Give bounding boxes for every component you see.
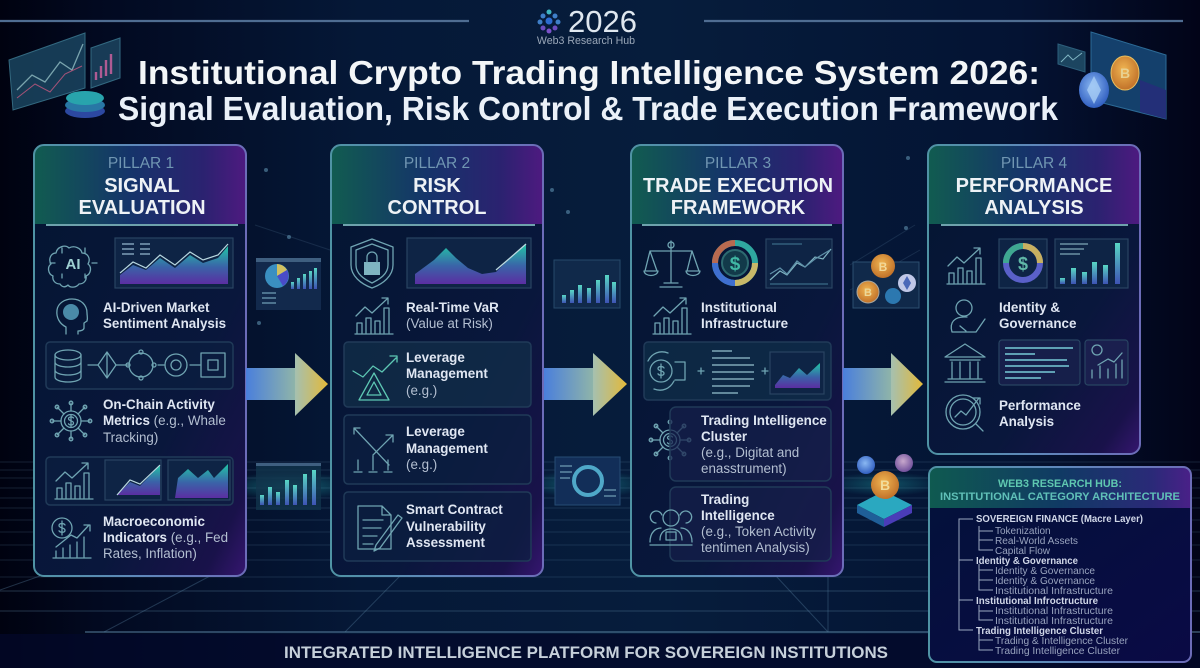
text: macro indicators: Macroeconomic <box>103 514 205 529</box>
text: ai-driven sentiment: Sentiment Analysis <box>103 316 226 331</box>
architecture header <box>929 467 1191 508</box>
category tree <box>959 514 1143 657</box>
mini dashboard: bars lower left <box>256 463 321 510</box>
pillar 4 header: PERFORMANCE <box>956 175 1112 197</box>
box: trading intelligence cluster: (e.g., Digitat and <box>701 445 799 460</box>
mini dashboard: coins: B <box>864 287 872 299</box>
logo: 2026 Web3 Research Hub: Web3 Research Hub <box>537 35 635 47</box>
chart: dollar donut: $ <box>730 254 741 275</box>
box: smart contract <box>344 492 531 561</box>
mini dashboard: bars upper middle <box>554 260 620 308</box>
chart: trade line panel <box>766 239 832 288</box>
pillar 3 header: TRADE EXECUTION <box>643 175 833 197</box>
icon: bar growth <box>355 298 393 334</box>
box: leverage management 1: Leverage <box>406 350 465 365</box>
icon: magnifier analysis <box>946 395 983 431</box>
arrow: pillar 2 to 3 <box>544 353 627 416</box>
logo: 2026 Web3 Research Hub <box>537 4 637 47</box>
text: institutional infrastructure: Infrastructure <box>701 316 788 331</box>
title <box>118 54 1059 127</box>
text: ai-driven sentiment <box>103 300 226 331</box>
text: performance analysis <box>999 398 1081 429</box>
category tree: Identity & Governance <box>976 556 1078 567</box>
text: real-time var: Real-Time VaR <box>406 300 499 315</box>
mini dashboard: donut lower middle <box>555 457 620 505</box>
pillar 2 header <box>331 145 543 224</box>
text: on-chain activity: On-Chain Activity <box>103 397 215 412</box>
chart: performance donut <box>999 239 1047 288</box>
icon: head with brain <box>57 299 87 334</box>
text: macro indicators: Indicators (e.g., Fed <box>103 530 228 545</box>
arrow: pillar 3 to 4 <box>843 353 923 416</box>
mini dashboard: coins: B <box>879 260 888 274</box>
icon: macro dollar chart <box>52 518 91 558</box>
category tree: Trading Intelligence Cluster <box>976 626 1103 637</box>
text: performance analysis: Performance <box>999 398 1081 413</box>
box: trading intelligence cluster: enasstrument) <box>701 461 787 476</box>
illustration: coins on platform: B <box>880 477 890 493</box>
category tree: Institutional Infroctructure <box>976 596 1098 607</box>
box: leverage management 1: Management <box>406 366 488 381</box>
text: macro indicators: Rates, Inflation) <box>103 546 197 561</box>
pillar 2 header: RISK <box>413 175 461 197</box>
text: macro indicators <box>103 514 228 561</box>
chart: performance donut: $ <box>1018 254 1028 274</box>
text: ai-driven sentiment: AI-Driven Market <box>103 300 210 315</box>
pillar 2 header: PILLAR 2 <box>404 155 470 172</box>
icon: performance chart <box>947 248 985 284</box>
mini dashboard: coins <box>853 254 919 308</box>
icon: team lock <box>650 510 692 545</box>
chart: dollar donut <box>715 243 755 283</box>
icon: AI brain: AI <box>66 256 80 273</box>
category tree: Real-World Assets <box>995 536 1078 547</box>
pillar 1 header: SIGNAL <box>104 175 180 197</box>
pillar 3 header: FRAMEWORK <box>671 197 806 219</box>
title: Signal Evaluation, Risk Control & Trade Execution Framework <box>118 90 1059 127</box>
text: performance analysis: Analysis <box>999 414 1054 429</box>
text: real-time var: (Value at Risk) <box>406 316 493 331</box>
pillar 4 header: PILLAR 4 <box>1001 155 1068 172</box>
text: identity governance: Identity & <box>999 300 1060 315</box>
top rule lines <box>0 20 1183 22</box>
category tree: Institutional Infrastructure <box>995 586 1113 597</box>
category tree: SOVEREIGN FINANCE (Macre Layer) <box>976 514 1143 525</box>
box: leverage management 2: Leverage <box>406 424 465 439</box>
illustration: crypto coins on screens: B <box>1120 65 1130 81</box>
box: trading intelligence activity <box>670 487 831 561</box>
box: leverage management 2 <box>344 415 531 484</box>
box: on-chain icon strip <box>46 342 233 389</box>
chart: performance bars <box>1055 239 1128 288</box>
icon: identity person check <box>951 300 985 332</box>
box: leverage management 1 <box>344 342 531 407</box>
arrow: pillar 1 to 2 <box>246 353 328 416</box>
category tree: Tokenization <box>995 526 1051 537</box>
logo: 2026 Web3 Research Hub: 2026 <box>568 4 637 39</box>
pillar 3 header <box>631 145 843 224</box>
illustration: trading screens with server stack <box>9 33 120 118</box>
box: leverage management 2: Management <box>406 441 488 456</box>
box: leverage management 1: (e.g.) <box>406 383 437 398</box>
illustration: coins on platform <box>857 454 913 527</box>
panel: pillar 4 performance analysis <box>928 145 1140 454</box>
text: on-chain activity <box>103 397 226 445</box>
category tree: Trading & Intelligence Cluster <box>995 636 1129 647</box>
icon: cluster network <box>649 420 691 460</box>
chart: sentiment area <box>115 238 233 288</box>
pillar 1 header <box>34 145 246 224</box>
box: trading intelligence cluster <box>670 407 831 481</box>
text: institutional infrastructure: Institutional <box>701 300 777 315</box>
pillar 3 header: PILLAR 3 <box>705 155 771 172</box>
mini dashboard: pie and bars <box>256 258 321 310</box>
icon: infrastructure growth <box>653 298 691 334</box>
box: leverage management 2: (e.g.) <box>406 457 437 472</box>
box: execution flow <box>644 342 831 400</box>
pillar 4 header <box>928 145 1140 224</box>
footer tagline: INTEGRATED INTELLIGENCE PLATFORM FOR SOVEREIGN INSTITUTIONS <box>284 644 888 662</box>
category tree: Institutional Infrastructure <box>995 616 1113 627</box>
box: smart contract: Assessment <box>406 535 485 550</box>
icon: whale network <box>50 401 92 441</box>
box: trading intelligence activity: Intelligence <box>701 508 775 523</box>
category tree: Trading Intelligence Cluster <box>995 646 1121 657</box>
category tree: Institutional Infrastructure <box>995 606 1113 617</box>
box: macro charts <box>46 457 233 505</box>
text: real-time var <box>406 300 499 331</box>
box: trading intelligence cluster: Cluster <box>701 429 748 444</box>
architecture header: INSTITUTIONAL CATEGORY ARCHITECTURE <box>940 491 1180 503</box>
illustration: crypto coins on screens <box>1058 32 1166 119</box>
chart: governance lines <box>999 340 1080 385</box>
pillar 1 header: PILLAR 1 <box>108 155 174 172</box>
category tree: Identity & Governance <box>995 576 1095 587</box>
architecture header: WEB3 RESEARCH HUB: <box>998 478 1122 490</box>
box: trading intelligence activity: (e.g., Token Activity <box>701 524 816 539</box>
box: trading intelligence cluster: Trading Intelligence <box>701 413 827 428</box>
text: identity governance <box>999 300 1076 331</box>
chart: mini governance panel <box>1085 340 1128 385</box>
text: identity governance: Governance <box>999 316 1076 331</box>
text: on-chain activity: Metrics (e.g., Whale <box>103 413 226 428</box>
box: smart contract: Vulnerability <box>406 519 486 534</box>
pillar 2 header: CONTROL <box>388 197 486 219</box>
panel: pillar 1 signal evaluation <box>34 145 246 576</box>
box: smart contract: Smart Contract <box>406 502 503 517</box>
category tree: Capital Flow <box>995 546 1051 557</box>
pillar 1 header: EVALUATION <box>78 197 206 219</box>
panel: pillar 2 risk control <box>331 145 543 576</box>
box: trading intelligence activity: Trading <box>701 492 749 507</box>
panel: web3 research hub architecture <box>929 467 1191 662</box>
chart: value at risk area <box>407 238 531 288</box>
title: Institutional Crypto Trading Intelligence System 2026: <box>138 54 1040 91</box>
box: trading intelligence activity: tentimen Analysis) <box>701 540 810 555</box>
icon: shield lock <box>351 239 393 288</box>
panel: pillar 3 trade execution <box>631 145 843 576</box>
icon: scales <box>644 241 700 287</box>
pillar 4 header: ANALYSIS <box>984 197 1084 219</box>
text: institutional infrastructure <box>701 300 788 331</box>
icon: AI brain <box>49 246 97 287</box>
category tree: Identity & Governance <box>995 566 1095 577</box>
text: on-chain activity: Tracking) <box>103 430 158 445</box>
icon: bank <box>945 344 985 382</box>
